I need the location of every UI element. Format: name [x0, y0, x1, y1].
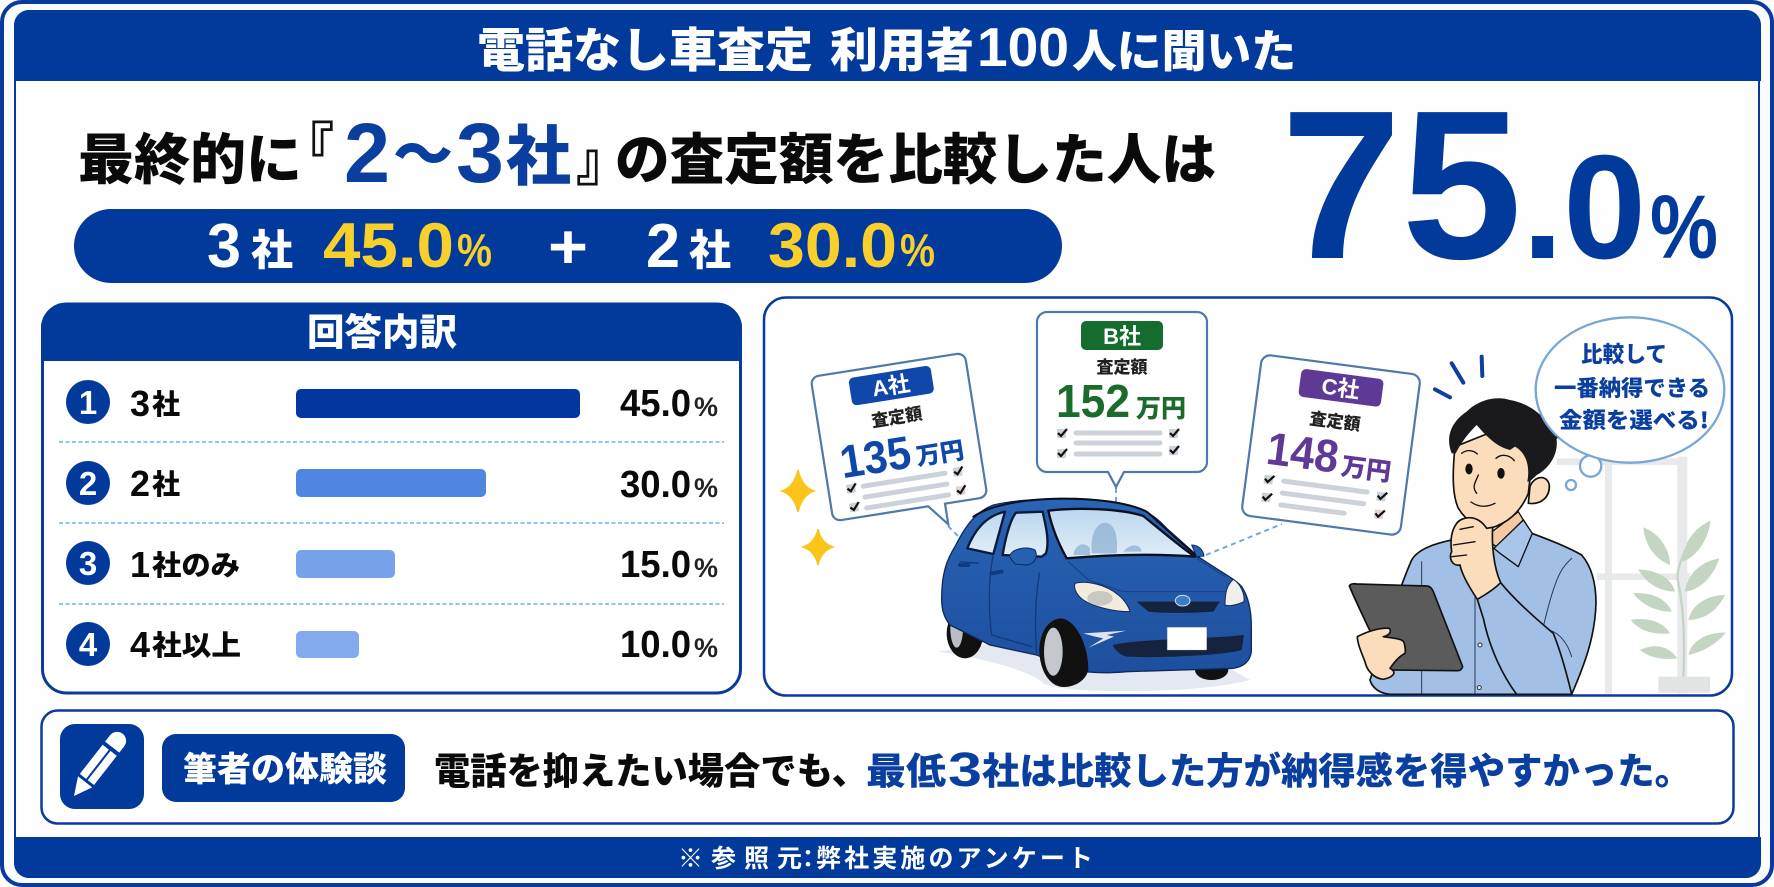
row 1: 45.0: [620, 383, 691, 425]
row 1: 1: [79, 384, 97, 421]
row 4: %: [694, 633, 718, 663]
big number 75.0%: .0: [1522, 125, 1646, 290]
row 1: %: [694, 392, 718, 422]
windshield: [1048, 509, 1195, 558]
man with tablet: [1349, 357, 1596, 694]
panel: illustration: [764, 298, 1732, 696]
summary pill: 30.0: [768, 211, 897, 281]
idea rays: [1435, 357, 1482, 397]
title: [477, 12, 1296, 81]
source note: [678, 839, 1093, 875]
source note: ※参照元: [678, 839, 802, 875]
row 3: 3: [79, 545, 97, 582]
summary pill: 3: [207, 212, 241, 281]
row 1: 3: [130, 383, 150, 424]
source note: ：: [796, 839, 820, 874]
mirror: [1009, 548, 1036, 565]
card: C: 査定額: [1308, 404, 1362, 436]
bubble text: 金額を選べる!: [1559, 403, 1709, 435]
row 2: %: [694, 473, 718, 503]
label B: [1081, 321, 1163, 350]
chin hand: [1450, 518, 1501, 599]
license plate: [1167, 627, 1207, 650]
background window and plant: [1557, 457, 1726, 693]
message text: 3: [948, 744, 982, 797]
thought bubble: [1536, 317, 1724, 490]
summary pill: +: [548, 213, 588, 282]
bubble text: 比較して: [1581, 337, 1667, 369]
header bar: [14, 10, 1761, 81]
title: 人に聞いた: [1072, 15, 1296, 80]
row 4: 4: [130, 624, 150, 665]
title: 100: [977, 16, 1069, 78]
price B: 万円: [1136, 389, 1186, 425]
message text: 社は比較した方が納得感を得やすかった。: [982, 741, 1692, 795]
checklist A: [846, 466, 967, 513]
summary pill: 2: [646, 212, 680, 281]
summary pill: 社: [251, 217, 293, 278]
price C: 万円: [1339, 447, 1393, 489]
badge: [1175, 595, 1190, 606]
price B: [1056, 375, 1186, 427]
icon: pencil: [60, 724, 144, 809]
headline: 〜: [393, 107, 453, 194]
row 4: 4: [79, 626, 98, 663]
face: [1453, 430, 1533, 529]
headline: 2: [344, 106, 390, 200]
upper grille: [1137, 602, 1220, 613]
dashed connectors: [948, 488, 1282, 555]
price B: 152: [1056, 375, 1130, 427]
lower grille: [1113, 635, 1244, 657]
row 3: 15.0: [620, 544, 691, 586]
headline: 社: [506, 104, 571, 198]
tablet: [1349, 584, 1463, 671]
headline: 』: [576, 117, 630, 196]
row 4: [66, 622, 718, 666]
title: 電話なし車査定: [477, 12, 813, 81]
card: C: [1241, 354, 1421, 536]
row 1: 社: [152, 383, 180, 423]
label A: A社: [870, 371, 912, 401]
card: A: [811, 353, 991, 542]
row 4: 10.0: [620, 624, 691, 666]
collar: [1494, 520, 1532, 567]
label B: B社: [1103, 324, 1141, 349]
row 4: 社以上: [152, 624, 241, 664]
headline: [78, 104, 1216, 200]
row 2: 社: [152, 463, 180, 503]
message text: 電話を抑えたい場合でも、: [434, 741, 868, 795]
sparkles: [782, 470, 833, 565]
price C: 148: [1264, 422, 1342, 483]
price A: 万円: [913, 430, 966, 472]
row 3: 社のみ: [152, 544, 240, 584]
neck: [1483, 512, 1523, 547]
summary pill: 社: [689, 217, 731, 278]
checklist C: [1261, 475, 1388, 520]
title: 利用者: [830, 12, 974, 81]
message text: 最低: [866, 741, 946, 795]
card: B: [1037, 312, 1207, 487]
headline: の査定額を比較した人は: [615, 115, 1216, 195]
bubble text: [1554, 337, 1710, 435]
big number 75.0%: [1281, 66, 1718, 303]
front wheel: [1039, 618, 1088, 687]
price A: [836, 417, 967, 488]
message text: [434, 741, 1692, 797]
row 1: [66, 380, 718, 425]
headline: 『: [280, 104, 334, 183]
roof edge: [973, 499, 1198, 557]
row 3: 1: [130, 544, 150, 585]
summary pill: [74, 209, 1062, 283]
eyes and expression: [1462, 451, 1514, 506]
label A: [848, 365, 935, 406]
headline: 3: [456, 106, 504, 200]
card: A: 査定額: [869, 399, 924, 432]
label C: [1298, 369, 1384, 407]
ear: [1528, 478, 1549, 504]
bubble text: 一番納得できる: [1554, 371, 1710, 403]
row 2: [66, 461, 718, 506]
headline: 最終的に: [78, 115, 302, 195]
far front wheel: [1195, 660, 1228, 680]
summary pill: %: [900, 224, 935, 276]
panel heading: [41, 302, 742, 361]
card: B: 査定額: [1096, 353, 1148, 378]
summary pill: %: [457, 224, 492, 276]
summary pill: 45.0: [323, 211, 454, 281]
row 2: 30.0: [620, 464, 691, 506]
hair: [1449, 398, 1557, 482]
scratch: [1083, 631, 1127, 648]
holding hand: [1357, 628, 1405, 679]
right headlight: [1225, 579, 1244, 606]
checklist B: [1057, 429, 1179, 458]
left headlight: [1075, 582, 1130, 612]
badge: author experience: [162, 734, 405, 802]
footer bar: [14, 837, 1761, 878]
badge: author experience: 筆者の体験談: [183, 742, 387, 791]
side windows: [967, 512, 1005, 554]
rear wheel: [947, 608, 983, 658]
shirt: [1370, 520, 1596, 694]
car: [938, 499, 1251, 691]
row 2: 2: [79, 465, 97, 502]
seats in cabin: [1073, 523, 1142, 555]
big number 75.0%: 75: [1281, 66, 1522, 303]
shirt details: [1422, 558, 1572, 693]
panel: response breakdown: [41, 302, 742, 693]
row 3: %: [694, 553, 718, 583]
row 3: [66, 541, 718, 586]
panel: author experience: [42, 710, 1734, 824]
hood line: [1068, 558, 1225, 592]
label C: C社: [1320, 373, 1361, 403]
big number 75.0%: %: [1650, 178, 1718, 278]
panel heading: 回答内訳: [307, 302, 457, 356]
door seams and handles: [960, 555, 1039, 653]
car body: [942, 499, 1251, 673]
raised sleeve: [1477, 583, 1572, 694]
price C: [1264, 422, 1395, 490]
row 2: 2: [130, 463, 150, 504]
price A: 135: [836, 426, 914, 488]
source note: 弊社実施のアンケート: [816, 839, 1093, 875]
